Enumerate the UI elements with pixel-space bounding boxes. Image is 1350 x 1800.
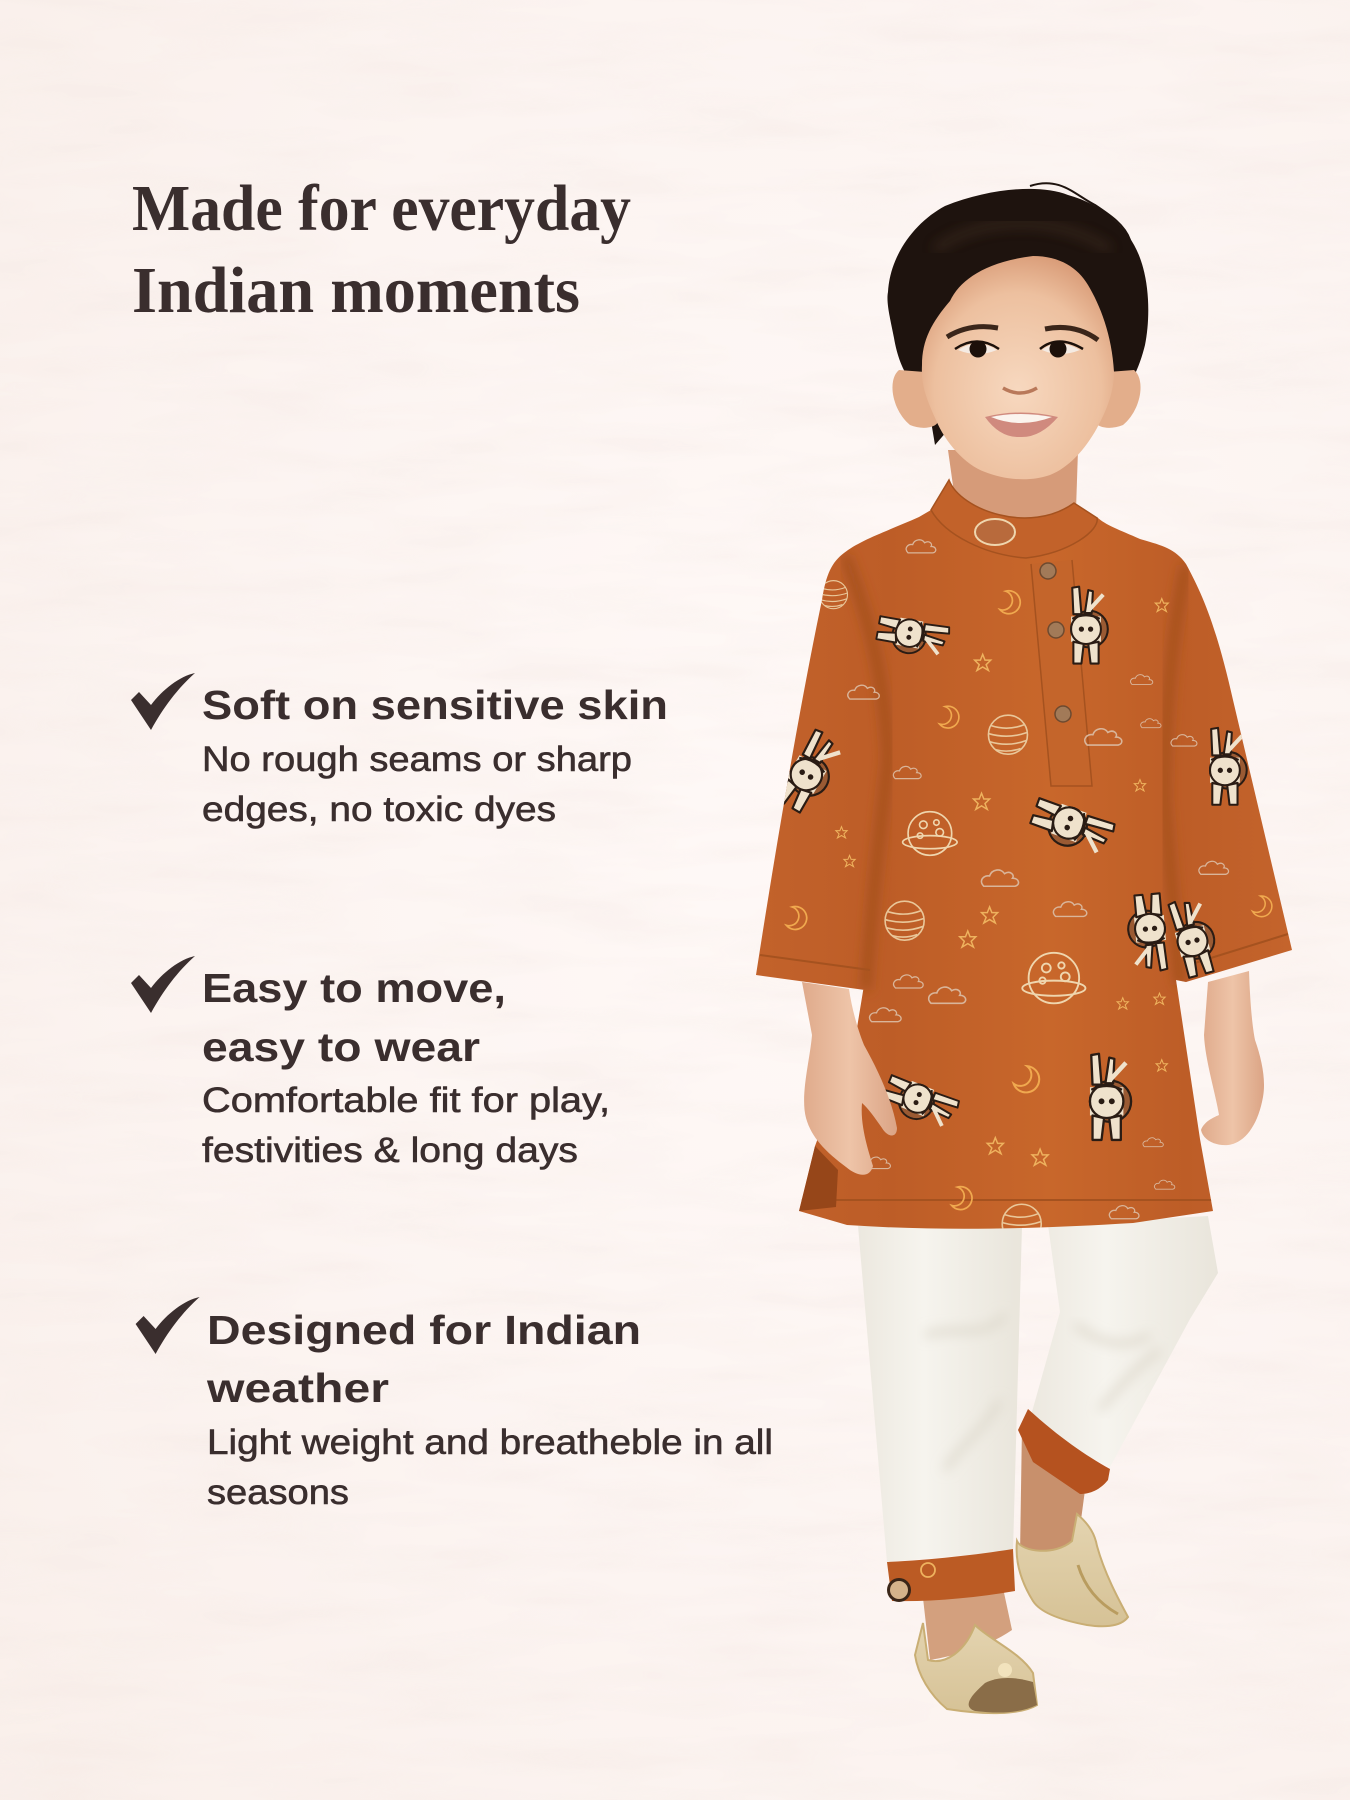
heading: easy to move, easy to wear: easy to wear bbox=[202, 1024, 480, 1070]
icon: check mark bbox=[136, 1297, 200, 1354]
heading: easy to move, easy to wear: Easy to move, bbox=[202, 965, 506, 1011]
benefit: designed for Indian weather bbox=[136, 1297, 773, 1512]
title: Made for everyday bbox=[132, 172, 631, 245]
benefit: soft on sensitive skin bbox=[131, 673, 668, 829]
text: designed for Indian weather detail: Light weight and breatheble in all bbox=[207, 1423, 773, 1462]
icon: check mark bbox=[131, 956, 195, 1013]
back foot and shoe bbox=[1017, 1425, 1128, 1626]
eyebrows bbox=[947, 327, 998, 337]
collar print bbox=[975, 519, 1015, 545]
title: Indian moments bbox=[132, 254, 580, 327]
collar bbox=[931, 480, 1097, 558]
kurta shading bbox=[760, 555, 1288, 1211]
text: designed for Indian weather detail bbox=[207, 1423, 773, 1512]
title bbox=[132, 172, 631, 327]
text: soft on sensitive skin detail: No rough seams or sharp bbox=[202, 740, 632, 779]
heading: soft on sensitive skin: Soft on sensitive skin bbox=[202, 682, 668, 728]
left arm and hand bbox=[802, 982, 897, 1175]
heading: designed for Indian weather: weather bbox=[206, 1365, 389, 1411]
text: soft on sensitive skin detail: edges, no toxic dyes bbox=[202, 790, 556, 829]
benefit: easy to move bbox=[131, 956, 610, 1170]
eyes bbox=[955, 340, 1083, 358]
hair bbox=[887, 189, 1148, 445]
face bbox=[922, 256, 1114, 479]
nose bbox=[1003, 388, 1037, 393]
front trouser leg bbox=[858, 1226, 1022, 1602]
right arm and hand bbox=[1201, 971, 1264, 1145]
text: easy to move detail: festivities & long days bbox=[202, 1131, 578, 1170]
placket buttons bbox=[1040, 563, 1071, 722]
text: easy to move detail: Comfortable fit for play, bbox=[202, 1081, 610, 1120]
text: easy to move detail bbox=[202, 1081, 610, 1170]
front trouser cuff bbox=[887, 1549, 1015, 1601]
text: designed for Indian weather detail: seasons bbox=[207, 1473, 349, 1512]
kurta bbox=[756, 510, 1292, 1243]
smile bbox=[985, 412, 1058, 437]
back trouser leg bbox=[1018, 1216, 1218, 1494]
text: soft on sensitive skin detail bbox=[202, 740, 632, 829]
back trouser cuff bbox=[1018, 1409, 1110, 1494]
head bbox=[887, 183, 1148, 479]
icon: check mark bbox=[131, 673, 195, 730]
front foot and shoe bbox=[915, 1588, 1037, 1713]
heading: designed for Indian weather bbox=[206, 1307, 641, 1411]
illustration: boy in orange kurta bbox=[756, 183, 1292, 1713]
heading: easy to move, easy to wear bbox=[202, 965, 506, 1070]
neck bbox=[948, 450, 1078, 540]
heading: designed for Indian weather: Designed for Indian bbox=[207, 1307, 641, 1353]
ears bbox=[892, 370, 938, 428]
kurta print motifs bbox=[775, 540, 1274, 1243]
